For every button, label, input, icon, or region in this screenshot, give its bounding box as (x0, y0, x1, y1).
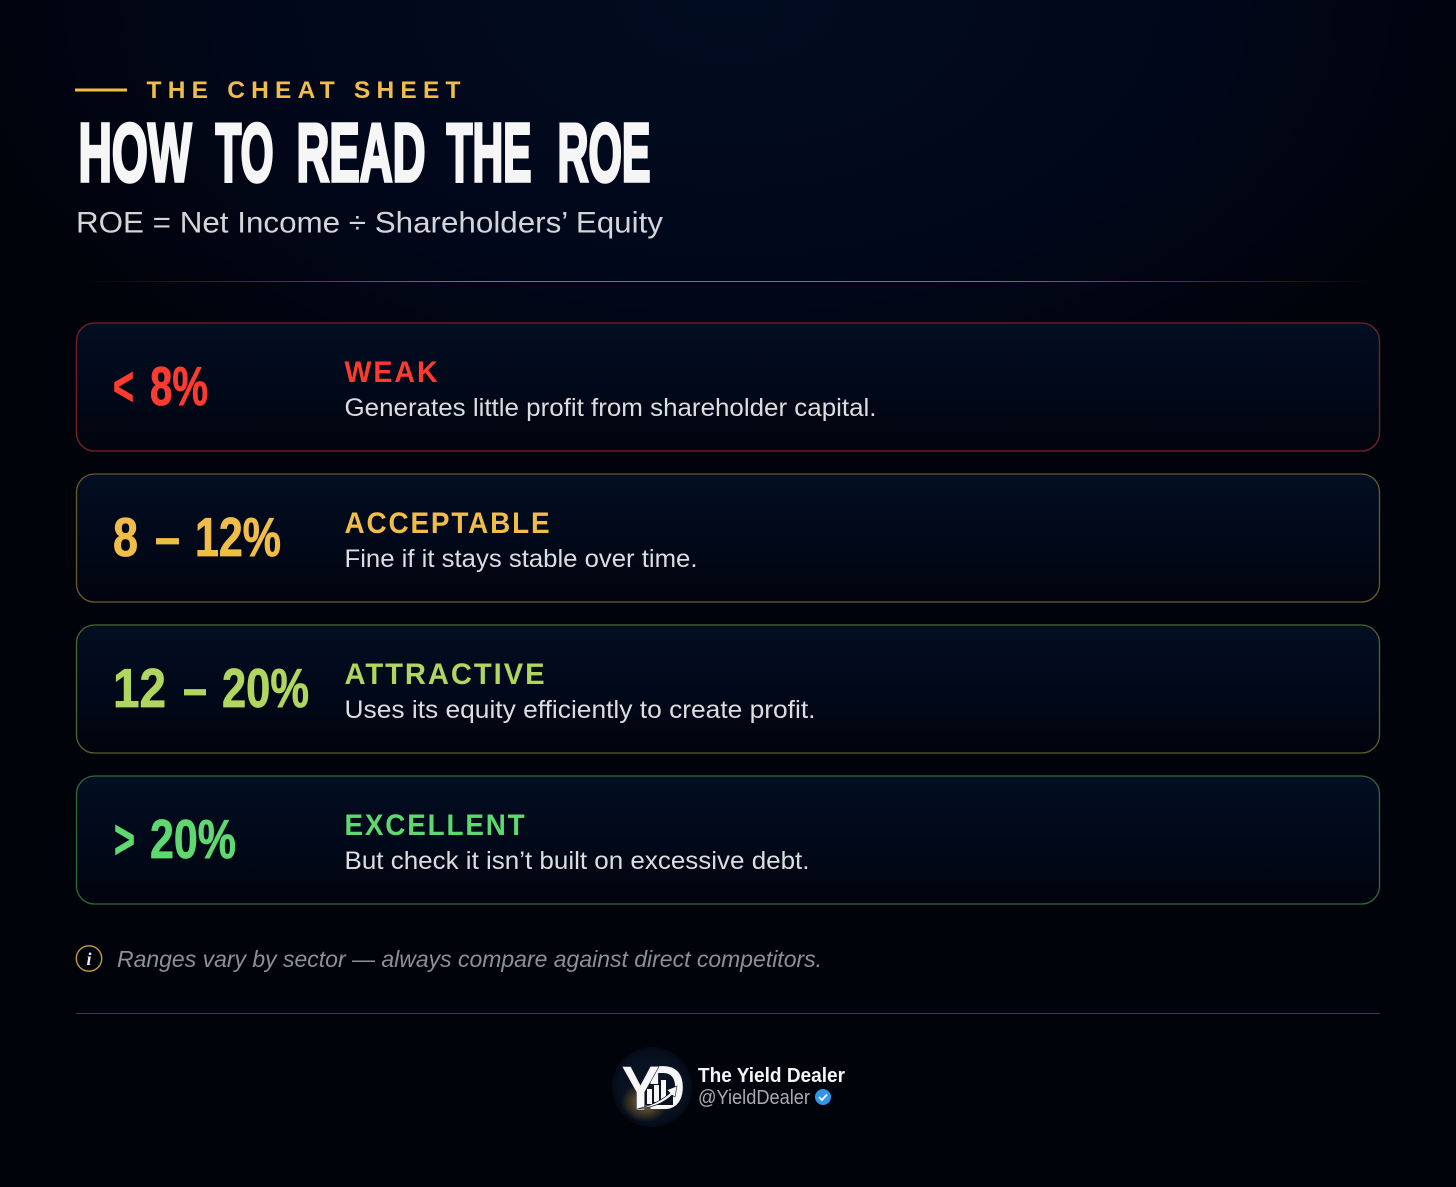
description: excellent: But check it isn’t built on excessive debt. (344, 847, 810, 875)
eyebrow accent line (75, 88, 127, 92)
range: over 20 percent: 20% (150, 808, 236, 870)
range: 8 to 12 percent (113, 506, 281, 568)
header divider (85, 281, 1375, 282)
description: acceptable: Fine if it stays stable over time. (344, 545, 698, 573)
range: under 8 percent (113, 355, 208, 417)
label: weak: WEAK (344, 356, 440, 389)
range: 12 to 20 percent: 20% (222, 657, 309, 719)
brand name: The Yield Dealer (698, 1065, 845, 1087)
panel: acceptable (76, 474, 1380, 602)
range: 8 to 12 percent: 8 (113, 506, 138, 568)
range: 12 to 20 percent: – (183, 657, 207, 719)
icon: info circle (76, 946, 102, 971)
brand handle: @YieldDealer (698, 1087, 810, 1109)
icon: logo: Y (621, 1054, 660, 1124)
range: 8 to 12 percent: – (155, 506, 180, 568)
brand footer (612, 1047, 845, 1127)
label: acceptable: ACCEPTABLE (344, 507, 552, 540)
label: excellent: EXCELLENT (344, 809, 526, 842)
panel: attractive (76, 625, 1380, 753)
icon: logo: D (647, 1054, 685, 1123)
title: THE (446, 106, 532, 199)
footer divider (76, 1013, 1380, 1014)
range: over 20 percent: > (114, 808, 135, 870)
title: TO (216, 106, 274, 199)
range: 12 to 20 percent: 12 (113, 657, 166, 719)
title: HOW (78, 106, 192, 199)
formula subtitle: ROE = Net Income ÷ Shareholders’ Equity (76, 206, 663, 240)
panel: weak (76, 323, 1380, 451)
footnote text: Ranges vary by sector — always compare against direct competitors. (117, 946, 822, 972)
eyebrow text: THE CHEAT SHEET (146, 77, 461, 104)
range: under 8 percent: 8% (150, 355, 208, 417)
description: weak: Generates little profit from shareholder capital. (344, 394, 876, 422)
header (75, 77, 663, 240)
icon: info circle: i (86, 949, 92, 969)
range: 8 to 12 percent: 12% (195, 506, 281, 568)
range: over 20 percent (114, 808, 236, 870)
range: under 8 percent: < (113, 355, 134, 417)
footnote (76, 946, 822, 972)
range: 12 to 20 percent (113, 657, 309, 719)
panel: excellent (76, 776, 1380, 904)
icon: logo (612, 1047, 692, 1127)
title: ROE (558, 106, 650, 199)
label: attractive: ATTRACTIVE (344, 658, 546, 691)
title: READ (296, 106, 426, 199)
description: attractive: Uses its equity efficiently to create profit. (344, 696, 816, 724)
title (78, 106, 650, 199)
icon: verified badge (815, 1089, 831, 1105)
